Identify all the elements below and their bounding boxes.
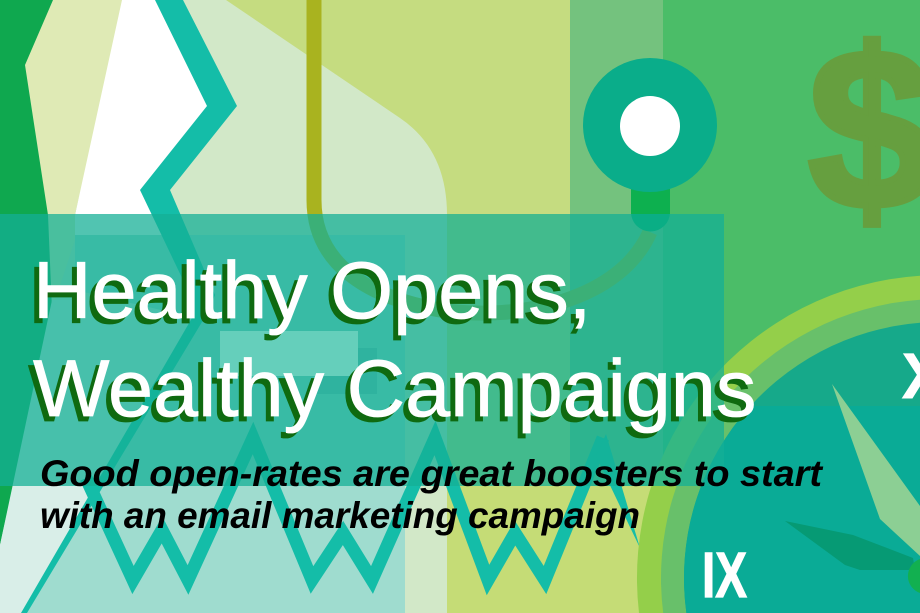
subtitle: Good open-rates are great boosters to start: [40, 453, 824, 494]
location pin icon: [583, 58, 717, 232]
clock dial lower shade: [684, 406, 920, 613]
clock minute hand: [832, 384, 920, 556]
clock hour hand: [785, 521, 915, 570]
mountain outline zigzag: [21, 0, 640, 613]
title: [28, 246, 756, 439]
clock numeral IX: IX: [702, 539, 747, 611]
title shadow: Wealthy Campaigns: [28, 349, 751, 439]
pale left mountain slope: [0, 300, 200, 613]
subtitle: [40, 453, 824, 536]
title text: [33, 246, 756, 434]
white mountain shape: [75, 0, 208, 240]
clock middle ring: [661, 300, 920, 613]
translucent teal band: [0, 214, 724, 486]
subtitle: with an email marketing campaign: [40, 495, 640, 536]
title text: Healthy Opens,: [33, 246, 591, 336]
clock outer ring: [637, 276, 920, 613]
title shadow: Healthy Opens,: [28, 251, 586, 341]
fishing line hook: [314, 0, 650, 313]
clock face: [637, 276, 920, 613]
pin neck: [631, 185, 670, 232]
title text: Wealthy Campaigns: [33, 344, 756, 434]
clock inner dial: [684, 323, 920, 613]
pin centre: [620, 96, 680, 156]
clock hub: [908, 559, 920, 593]
pale teal mountain body: [23, 235, 405, 613]
pin ring: [583, 58, 717, 192]
title shadow: [28, 251, 751, 439]
small light rectangle: [220, 331, 377, 394]
